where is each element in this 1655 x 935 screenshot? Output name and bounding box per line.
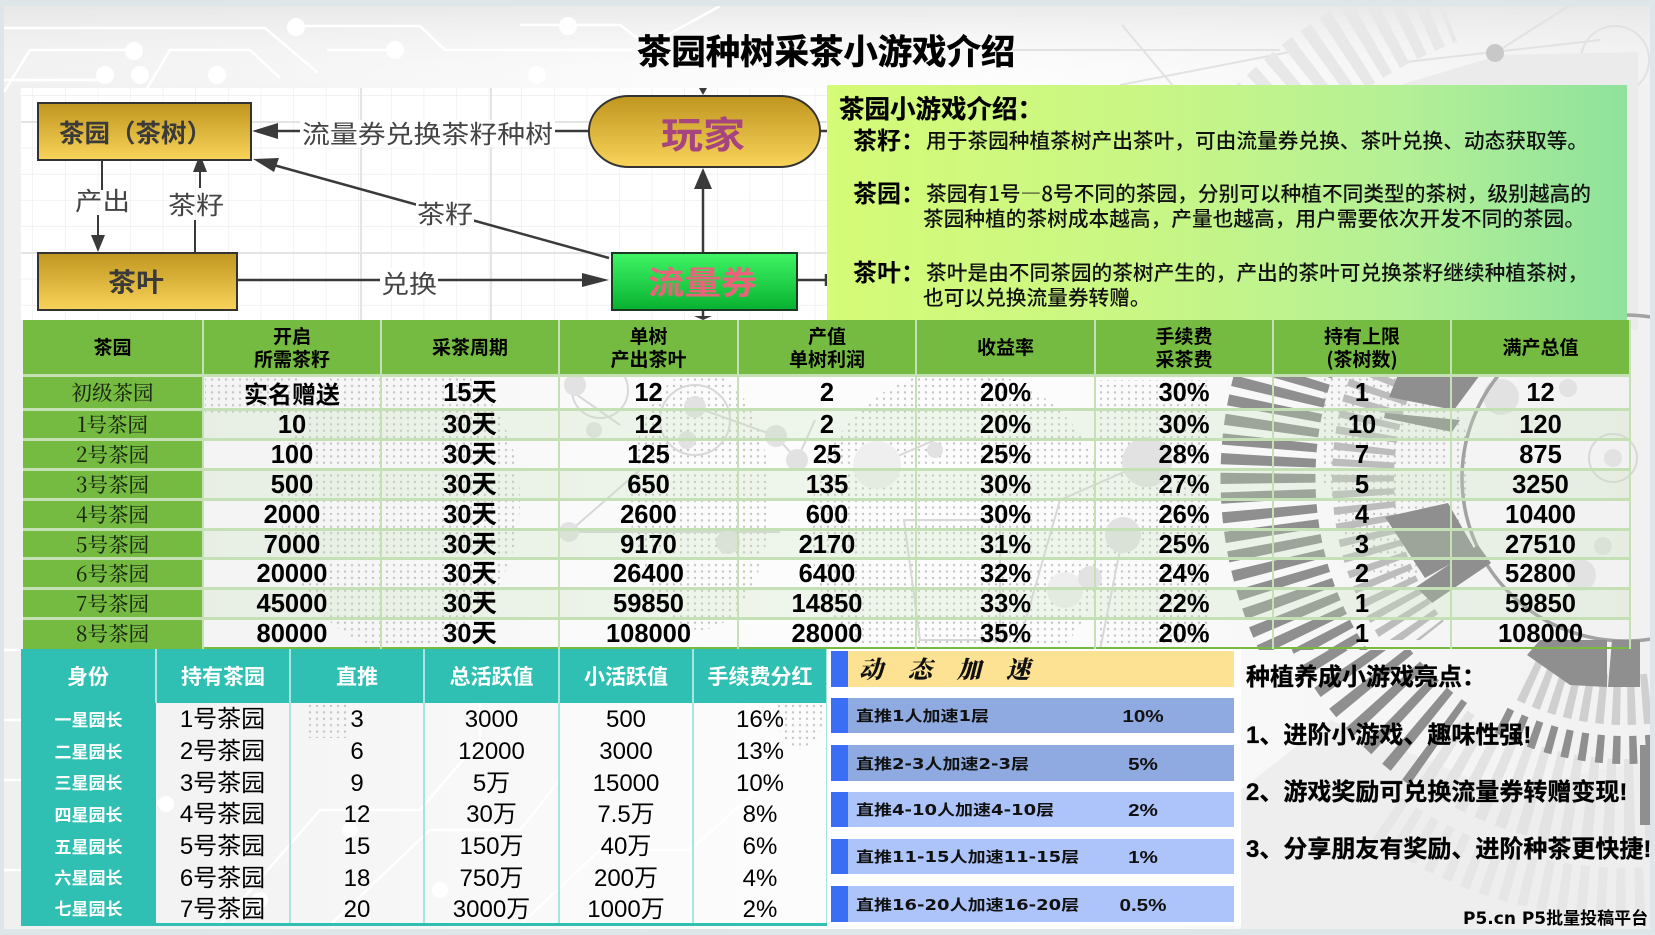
table: tea garden levels: 35% <box>980 620 1031 648</box>
table: member levels: 手续费分红 <box>708 661 812 691</box>
table: member levels: 13% <box>736 738 784 765</box>
light sector <box>1241 720 1374 929</box>
table: tea garden levels: 30% <box>980 471 1031 499</box>
table: member levels: 持有茶园 <box>181 661 265 691</box>
row: 直推11-15人: 1% <box>1128 847 1158 867</box>
table: tea garden levels: 30天 <box>443 590 497 618</box>
table: tea garden levels: 135 <box>806 471 848 499</box>
table: member levels: 7.5万 <box>597 801 655 828</box>
top right faint shapes <box>1000 13 1650 86</box>
table: tea garden levels: 2170 <box>799 530 855 558</box>
table: member levels: 1号茶园 <box>180 706 265 733</box>
table: tea garden levels: 30天 <box>443 530 497 558</box>
table: tea garden levels: 30天 <box>443 501 497 529</box>
table: tea garden levels: 30天 <box>443 411 497 439</box>
item: 茶叶: 茶叶： <box>853 253 925 288</box>
table: member levels: 7号茶园 <box>180 896 265 923</box>
table: tea garden levels: 采茶周期 <box>432 333 508 360</box>
arrow: 茶叶 to 流量券 <box>237 265 609 301</box>
arrow: 流量券 to 茶园: 茶籽 <box>417 195 473 231</box>
table: member levels: 15 <box>344 833 370 860</box>
flow diagram <box>21 88 827 320</box>
table: member levels: 1000万 <box>587 896 665 923</box>
table: tea garden levels: 45000 <box>257 590 327 618</box>
table: tea garden levels: 10 <box>1348 411 1376 439</box>
table: tea garden levels: 120 <box>1519 411 1562 439</box>
table: tea garden levels: 30天 <box>443 560 497 588</box>
table: member levels: 5号茶园 <box>180 833 265 860</box>
table: member levels: 8% <box>743 801 777 828</box>
highlight 1: 1、进阶小游戏、趣味性强! <box>1246 722 1531 749</box>
table: member levels: 6% <box>743 833 777 860</box>
dark blocks <box>1384 375 1650 825</box>
table: tea garden levels: 52800 <box>1505 560 1576 588</box>
panel: dynamic acceleration <box>827 649 1241 926</box>
table: tea garden levels: 26400 <box>613 560 684 588</box>
table: tea garden levels: 32% <box>980 560 1031 588</box>
table: tea garden levels: 30天 <box>443 620 497 648</box>
table: tea garden levels: 20% <box>980 379 1031 407</box>
table: member levels: 6号茶园 <box>180 865 265 892</box>
table: member levels: 五星园长 <box>54 833 122 858</box>
heading bar: 动态加速: 动态加速 <box>859 650 1055 685</box>
table: tea garden levels: (茶树数) <box>1326 345 1398 372</box>
arrow: 茶园 to 茶叶, 产出 <box>75 160 130 252</box>
table: tea garden levels: 持有上限 <box>1324 322 1400 349</box>
table: tea garden levels: 2600 <box>620 501 677 529</box>
arrow: 茶叶 to 流量券: 兑换 <box>381 265 437 301</box>
table: member levels: 30万 <box>466 801 517 828</box>
heading bar: 动态加速 <box>831 651 1234 687</box>
highlights heading: 种植养成小游戏亮点： <box>1246 664 1486 691</box>
table: tea garden levels: 31% <box>980 530 1031 558</box>
table: tea garden levels: 8号茶园 <box>76 617 149 647</box>
arrow: 流量券 to 茶园 <box>253 158 609 258</box>
item: 茶籽: 茶籽： <box>853 121 925 156</box>
box: 流量券 <box>612 253 797 310</box>
table: tea garden levels: 875 <box>1519 441 1562 469</box>
table: tea garden levels: 28% <box>1158 441 1210 469</box>
table: tea garden levels: 24% <box>1158 560 1210 588</box>
arrow: 流量券 to 玩家 <box>694 168 712 253</box>
table: tea garden levels: 30% <box>980 501 1031 529</box>
table: tea garden levels: 茶园 <box>93 333 132 360</box>
table: tea garden levels: 22% <box>1158 590 1210 618</box>
table: tea garden levels: 28000 <box>792 620 862 648</box>
table: tea garden levels: 600 <box>806 501 848 529</box>
table: tea garden levels: 7 <box>1355 441 1369 469</box>
table: tea garden levels: 26% <box>1158 501 1210 529</box>
table: member levels: 身份 <box>67 661 109 691</box>
table: member levels <box>21 649 828 926</box>
table: member levels: 6 <box>350 738 364 765</box>
item: 茶叶: 茶叶是由不同茶园的茶树产生的，产出的茶叶可兑换茶籽继续种植茶树， <box>926 256 1588 286</box>
highlight 3: 3、分享朋友有奖励、进阶种茶更快捷! <box>1246 836 1651 863</box>
table: member levels: 2号茶园 <box>180 738 265 765</box>
table: tea garden levels: 20% <box>1158 620 1210 648</box>
row: 直推2-3人 <box>831 745 1234 781</box>
table: tea garden levels: 3250 <box>1512 471 1569 499</box>
table: tea garden levels: 3 <box>1355 530 1369 558</box>
arrow stubs <box>694 88 831 320</box>
table: tea garden levels: 2 <box>820 379 834 407</box>
table: member levels: 3000 <box>465 706 518 733</box>
table: tea garden levels: 650 <box>627 471 670 499</box>
row: 直推1人 <box>831 698 1234 733</box>
table: tea garden levels: 单树利润 <box>789 345 865 372</box>
table: tea garden levels: 25% <box>980 441 1031 469</box>
table: tea garden levels: 20% <box>980 411 1031 439</box>
table: member levels: 总活跃值 <box>450 661 534 691</box>
row: 直推1人: 10% <box>1122 706 1164 726</box>
row: 直推1人: 直推1人加速1层 <box>856 707 989 725</box>
table: member levels: 18 <box>344 865 370 892</box>
table: member levels: 2% <box>743 896 777 923</box>
table: member levels: 10% <box>736 770 784 797</box>
table: tea garden levels: 2 <box>820 411 834 439</box>
table: tea garden levels: 30天 <box>443 471 497 499</box>
table: tea garden levels: 12 <box>634 379 663 407</box>
title: 茶园种树采茶小游戏介绍 <box>637 24 1015 74</box>
row: 直推4-10人: 直推4-10人加速4-10层 <box>856 801 1054 819</box>
table: tea garden levels: 108000 <box>606 620 691 648</box>
network nodes <box>569 362 1637 650</box>
table: tea garden levels: 初级茶园 <box>72 376 154 406</box>
highlight 2: 2、游戏奖励可兑换流量券转赠变现! <box>1246 779 1627 806</box>
table: member levels: 20 <box>344 896 370 923</box>
table: tea garden levels: 开启 <box>273 322 311 349</box>
table: tea garden levels: 27% <box>1158 471 1210 499</box>
table: tea garden levels: 2000 <box>264 501 320 529</box>
box: 玩家 <box>589 96 820 167</box>
table: tea garden levels: 30% <box>1158 411 1210 439</box>
table: tea garden levels: 10400 <box>1505 501 1576 529</box>
table: tea garden levels: 收益率 <box>977 333 1034 360</box>
table: tea garden levels: 125 <box>627 441 670 469</box>
table: tea garden levels: 30天 <box>443 441 497 469</box>
table: member levels: 40万 <box>601 833 651 860</box>
item: 茶叶 <box>853 253 1588 311</box>
table: tea garden levels: 1号茶园 <box>77 408 148 438</box>
table: tea garden levels: 2号茶园 <box>76 438 149 468</box>
table: tea garden levels: 12 <box>634 411 663 439</box>
table: tea garden levels: 实名赠送 <box>244 375 340 410</box>
row: 直推16-20人 <box>831 886 1234 922</box>
box: 玩家: 玩家 <box>661 105 745 159</box>
table: tea garden levels <box>23 320 1631 649</box>
table: member levels: 直推 <box>336 661 378 691</box>
arrow: 茶叶 to 茶园, 茶籽 <box>168 154 224 253</box>
table: member levels: 3000万 <box>453 896 530 923</box>
box: 茶叶 <box>38 253 237 310</box>
table: tea garden levels: 500 <box>271 471 313 499</box>
table: member levels: 3000 <box>599 738 653 765</box>
table: tea garden levels: 59850 <box>613 590 684 618</box>
item: 茶籽: 用于茶园种植茶树产出茶叶，可由流量券兑换、茶叶兑换、动态获取等。 <box>926 124 1588 154</box>
arrow: 茶叶 to 茶园, 茶籽: 茶籽 <box>168 186 224 222</box>
table: member levels: 四星园长 <box>54 801 122 826</box>
row: 直推2-3人: 5% <box>1128 754 1158 774</box>
arrow: 玩家 to 茶园: 流量券兑换茶籽种树 <box>302 115 553 151</box>
item: 茶叶: 也可以兑换流量券转赠。 <box>923 281 1151 311</box>
box: 茶叶: 茶叶 <box>108 262 164 300</box>
table: member levels: 小活跃值 <box>584 661 668 691</box>
table: tea garden levels: 108000 <box>1498 620 1583 648</box>
intro heading: 茶园小游戏介绍： <box>839 89 1043 126</box>
table: tea garden levels: 7000 <box>264 530 320 558</box>
table: member levels: 15000 <box>593 770 659 797</box>
table: member levels: 5万 <box>473 770 510 797</box>
table: tea garden levels: 25% <box>1158 530 1210 558</box>
table: tea garden levels: 9170 <box>620 530 677 558</box>
dot sphere <box>205 350 1470 750</box>
table: member levels: 4% <box>743 865 777 892</box>
table: member levels: 七星园长 <box>54 895 122 920</box>
table: tea garden levels: 25 <box>813 441 841 469</box>
table: tea garden levels: 12 <box>1526 379 1555 407</box>
table: tea garden levels: 产出茶叶 <box>610 345 686 372</box>
table: member levels: 200万 <box>594 865 658 892</box>
table: member levels: 9 <box>350 770 364 797</box>
table: tea garden levels: 5号茶园 <box>76 528 149 558</box>
row: 直推11-15人 <box>831 839 1234 874</box>
table: tea garden levels: 20000 <box>257 560 327 588</box>
table: tea garden levels: 4 <box>1355 501 1369 529</box>
table: tea garden levels: 14850 <box>792 590 862 618</box>
table: tea garden levels: 4号茶园 <box>76 498 149 528</box>
watermark: P5.cn P5批量投稿平台 <box>1463 909 1648 929</box>
row: 直推4-10人: 2% <box>1128 800 1158 820</box>
row: 直推4-10人 <box>831 792 1234 827</box>
box: 茶园（茶树）: 茶园（茶树） <box>59 114 212 150</box>
table: tea garden levels: 产值 <box>808 322 846 349</box>
table: tea garden levels: 27510 <box>1505 530 1576 558</box>
row: 直推16-20人: 0.5% <box>1119 895 1167 915</box>
table: tea garden levels: 100 <box>271 441 313 469</box>
table: tea garden levels: 单树 <box>629 322 668 349</box>
table: tea garden levels: 80000 <box>257 620 327 648</box>
table: tea garden levels: 1 <box>1355 620 1369 648</box>
radial bars <box>1220 313 1650 849</box>
table: member levels: 三星园长 <box>54 769 122 794</box>
item: 茶园: 茶园种植的茶树成本越高，产量也越高，用户需要依次开发不同的茶园。 <box>923 202 1585 232</box>
arrow: 茶园 to 茶叶, 产出: 产出 <box>75 182 130 218</box>
table: member levels: 二星园长 <box>54 738 122 763</box>
table: tea garden levels: 10 <box>278 411 306 439</box>
table: tea garden levels: 3号茶园 <box>76 468 149 498</box>
item: 茶园 <box>853 174 1591 232</box>
table: tea garden levels: 5 <box>1355 471 1369 499</box>
item: 茶园: 茶园有1号—8号不同的茶园，分别可以种植不同类型的茶树，级别越高的 <box>926 177 1591 207</box>
panel: game introduction <box>827 85 1627 320</box>
table: member levels: 六星园长 <box>54 864 122 889</box>
table: tea garden levels: 1 <box>1355 379 1369 407</box>
box: 茶园（茶树） <box>38 103 251 160</box>
table: member levels: 3 <box>350 706 364 733</box>
arrow: 玩家 to 茶园 <box>252 115 589 151</box>
table: tea garden levels: 采茶费 <box>1155 345 1212 372</box>
table: tea garden levels: 33% <box>980 590 1031 618</box>
item: 茶园: 茶园： <box>853 174 925 209</box>
table: member levels: 3号茶园 <box>180 770 265 797</box>
table: member levels: 16% <box>736 706 784 733</box>
table: tea garden levels: 1 <box>1355 590 1369 618</box>
table: member levels: 500 <box>606 706 646 733</box>
row: 直推11-15人: 直推11-15人加速11-15层 <box>856 848 1079 866</box>
table: member levels: 12 <box>344 801 370 828</box>
table: tea garden levels: 6号茶园 <box>76 557 149 587</box>
box: 流量券: 流量券 <box>648 258 757 304</box>
table: member levels: 150万 <box>459 833 524 860</box>
table: member levels: 12000 <box>458 738 525 765</box>
table: member levels: 4号茶园 <box>180 801 265 828</box>
row: 直推16-20人: 直推16-20人加速16-20层 <box>856 896 1079 914</box>
table: tea garden levels: 满产总值 <box>1502 333 1578 360</box>
table: member levels: 一星园长 <box>54 706 122 731</box>
table: tea garden levels: 7号茶园 <box>76 587 149 617</box>
table: tea garden levels: 15天 <box>443 379 497 407</box>
table: tea garden levels: 所需茶籽 <box>254 345 330 372</box>
table: member levels: 750万 <box>459 865 524 892</box>
table: tea garden levels: 30% <box>1158 379 1210 407</box>
row: 直推2-3人: 直推2-3人加速2-3层 <box>856 755 1029 773</box>
table: tea garden levels: 2 <box>1355 560 1369 588</box>
table: tea garden levels: 59850 <box>1505 590 1576 618</box>
table: tea garden levels: 手续费 <box>1155 322 1212 349</box>
table: tea garden levels: 6400 <box>799 560 855 588</box>
